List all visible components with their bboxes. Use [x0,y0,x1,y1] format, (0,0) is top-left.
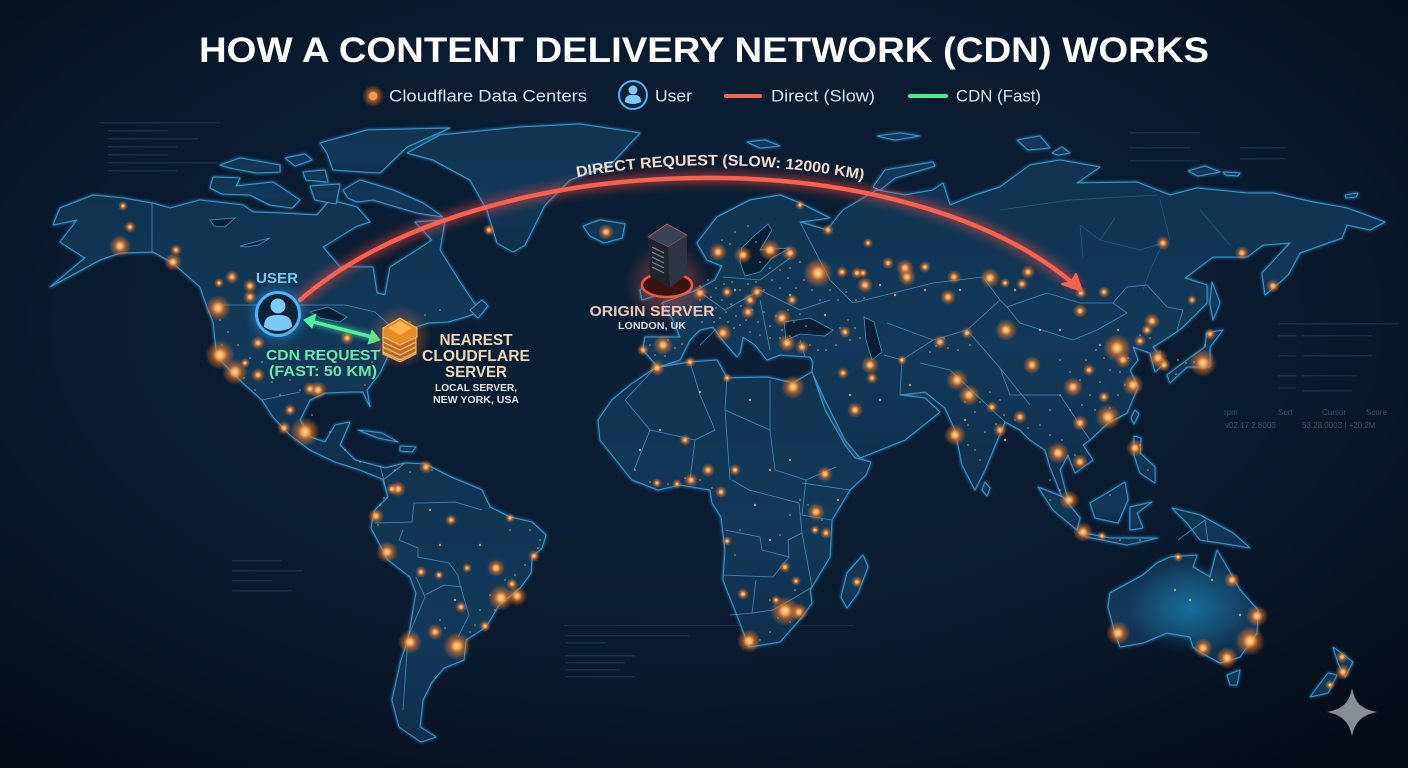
sakhalin [1210,282,1220,320]
taiwan, philippines [1131,410,1139,424]
legend: user [619,81,693,109]
legend: data centers: Cloudflare Data Centers [389,88,587,106]
faint data table: v02.17 2.8000 [1225,421,1276,430]
british isles [640,282,654,300]
label: cdn request [266,347,380,380]
faint technical readouts [100,122,1398,678]
direct request arc [300,178,1082,300]
icon: user [253,289,303,339]
label: london: LONDON, UK [618,320,686,332]
arrowhead: direct request [1062,274,1082,291]
legend [362,81,1041,109]
label: origin server: ORIGIN SERVER [590,303,715,320]
label: nearest cloudflare server: SERVER [445,364,507,381]
arrowhead: left [304,314,316,328]
faint data table [1224,408,1387,430]
inland seas [210,218,882,360]
legend: direct: Direct (Slow) [771,88,875,106]
arctic archipelagos [873,162,935,190]
world map [50,124,1385,742]
sri lanka [982,482,990,496]
label: nearest cloudflare server: LOCAL SERVER, [435,382,517,394]
greenland [407,124,640,252]
sumatra, java [1038,487,1080,530]
faint data table: Cursor [1322,408,1346,417]
legend: data centers [362,85,587,107]
madagascar [841,555,868,608]
label: nearest cloudflare server: NEAREST [440,332,513,349]
caribbean islands [358,430,398,442]
borders [152,203,1208,710]
label: cdn request: (FAST: 50 KM) [269,363,377,380]
north america [50,195,480,480]
cdn request arrow [304,314,380,344]
icon: sparkle watermark [1327,688,1377,736]
label: nearest cloudflare server [422,332,530,406]
newfoundland and iceland [470,300,488,318]
user marker [253,271,303,339]
arctic islands [210,177,300,208]
small city lights dense [220,226,1205,640]
eurasia [643,160,1385,500]
faint siberia network [1000,195,1230,290]
new guinea [1172,508,1250,548]
legend: cdn [910,88,1041,106]
title: HOW A CONTENT DELIVERY NETWORK (CDN) WORKS [199,31,1209,70]
australia [1108,550,1258,663]
icon: nearest cloudflare server [368,305,432,369]
faint data table: 53.28.0003 | +20.2M [1302,421,1376,430]
label: nearest cloudflare server: NEW YORK, USA [433,394,519,406]
faint data table: rpm [1224,408,1238,417]
small city lights sparse [430,285,1240,615]
legend: user: User [655,88,693,106]
label: nearest cloudflare server: CLOUDFLARE [422,348,530,365]
blue glow over australia [1128,562,1252,654]
faint data table: Score [1366,408,1387,417]
data center lights [109,200,1351,690]
faint data table: Sort [1278,408,1293,417]
label: cdn request: CDN REQUEST [266,347,380,364]
tasmania, new zealand [1227,670,1240,685]
legend: cdn: CDN (Fast) [956,88,1041,106]
south america [371,463,546,742]
label: user: USER [256,271,299,287]
arrowhead: right [368,330,380,344]
japan [1167,330,1223,383]
africa [598,360,871,647]
icon: server on glowing ring [625,224,709,326]
label: direct request: DIRECT REQUEST (SLOW: 12000 KM) [576,154,864,182]
borneo, sulawesi [1090,482,1128,523]
origin server [590,224,715,332]
